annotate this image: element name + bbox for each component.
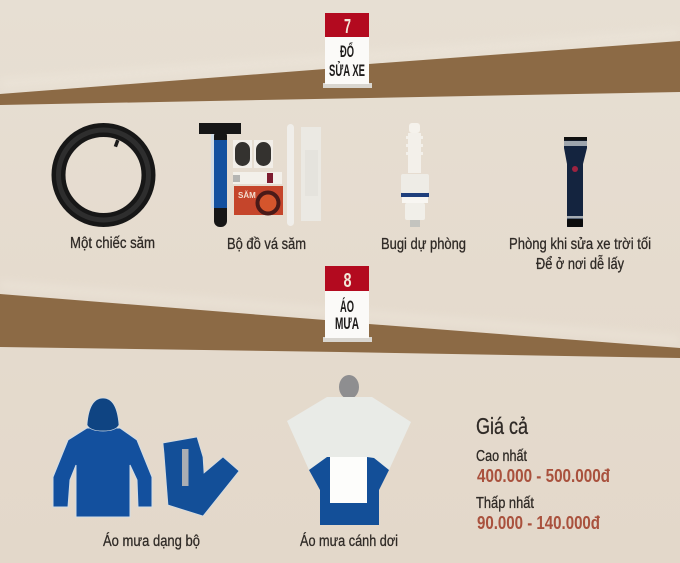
section tag 7: SỬA XE <box>329 61 365 80</box>
label: poncho raincoat: Áo mưa cánh dơi <box>300 531 398 550</box>
label: repair kit: Bộ đồ vá săm <box>227 236 306 253</box>
icon: poncho raincoat <box>287 375 411 525</box>
section tag 8: MƯA <box>335 314 359 333</box>
icon: flashlight <box>564 137 587 227</box>
section tag 8 <box>323 266 372 342</box>
price block <box>476 413 611 533</box>
icon: inner tube <box>58 130 148 220</box>
section tag 7 <box>323 13 372 88</box>
label: inner tube: Một chiếc săm <box>70 235 155 252</box>
section tag 7: ĐỔ <box>340 42 354 61</box>
price block: Cao nhất <box>476 448 527 465</box>
brown band: section 8 <box>0 294 680 358</box>
price block: 90.000 - 140.000đ <box>477 512 601 533</box>
label: flashlight note: Để ở nơi dễ lấy <box>536 254 624 273</box>
label: flashlight note: Phòng khi sửa xe trời tối <box>509 236 651 253</box>
icon: tube repair kit <box>199 123 321 227</box>
label: flashlight note <box>509 236 651 273</box>
price block: 400.000 - 500.000đ <box>477 465 611 486</box>
section tag 7: 7 <box>344 16 351 38</box>
section tag 8: 8 <box>344 270 352 292</box>
brown band: section 7 <box>0 41 680 105</box>
icon: two-piece raincoat <box>53 398 239 517</box>
label: spark plug: Bugi dự phòng <box>381 236 466 253</box>
icon: tube repair kit: SĂM <box>238 191 256 200</box>
icon: spark plug <box>401 123 429 227</box>
section tag 8: ÁO <box>340 297 354 316</box>
price block: Giá cả <box>476 413 528 439</box>
price block: Thấp nhất <box>476 495 534 512</box>
label: two-piece raincoat: Áo mưa dạng bộ <box>103 531 200 550</box>
